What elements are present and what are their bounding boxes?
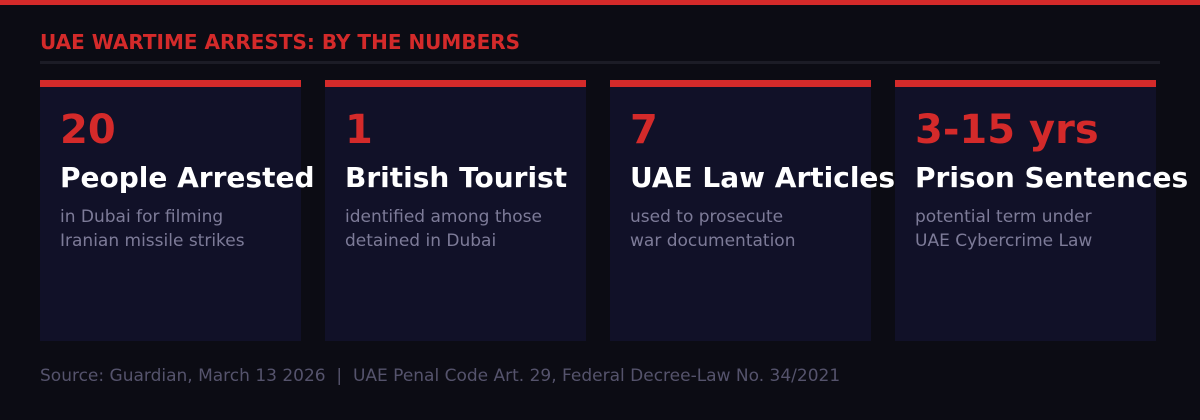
source: Source: Guardian, March 13 2026 | UAE Penal Code Art. 29, Federal Decree-Law No. 34/2021 (40, 366, 840, 386)
number: 1 (345, 107, 373, 153)
description: identified among those (345, 207, 542, 227)
description: war documentation (630, 231, 795, 251)
label: People Arrested (60, 161, 314, 194)
description (345, 207, 542, 251)
description: in Dubai for filming (60, 207, 223, 227)
label: Prison Sentences (915, 161, 1188, 194)
number: 7 (630, 107, 658, 153)
description (630, 207, 795, 251)
title: UAE WARTIME ARRESTS: BY THE NUMBERS (40, 30, 520, 54)
description: used to prosecute (630, 207, 783, 227)
description: UAE Cybercrime Law (915, 231, 1092, 251)
label: UAE Law Articles (630, 161, 895, 194)
card: law articles (610, 80, 871, 341)
card: people arrested (40, 80, 301, 341)
description: detained in Dubai (345, 231, 496, 251)
description (915, 207, 1092, 251)
description: potential term under (915, 207, 1092, 227)
card: prison sentences (895, 80, 1156, 341)
description: Iranian missile strikes (60, 231, 245, 251)
label: British Tourist (345, 161, 567, 194)
number: 20 (60, 107, 116, 153)
description (60, 207, 245, 251)
card: british tourist (325, 80, 586, 341)
number: 3-15 yrs (915, 107, 1099, 153)
